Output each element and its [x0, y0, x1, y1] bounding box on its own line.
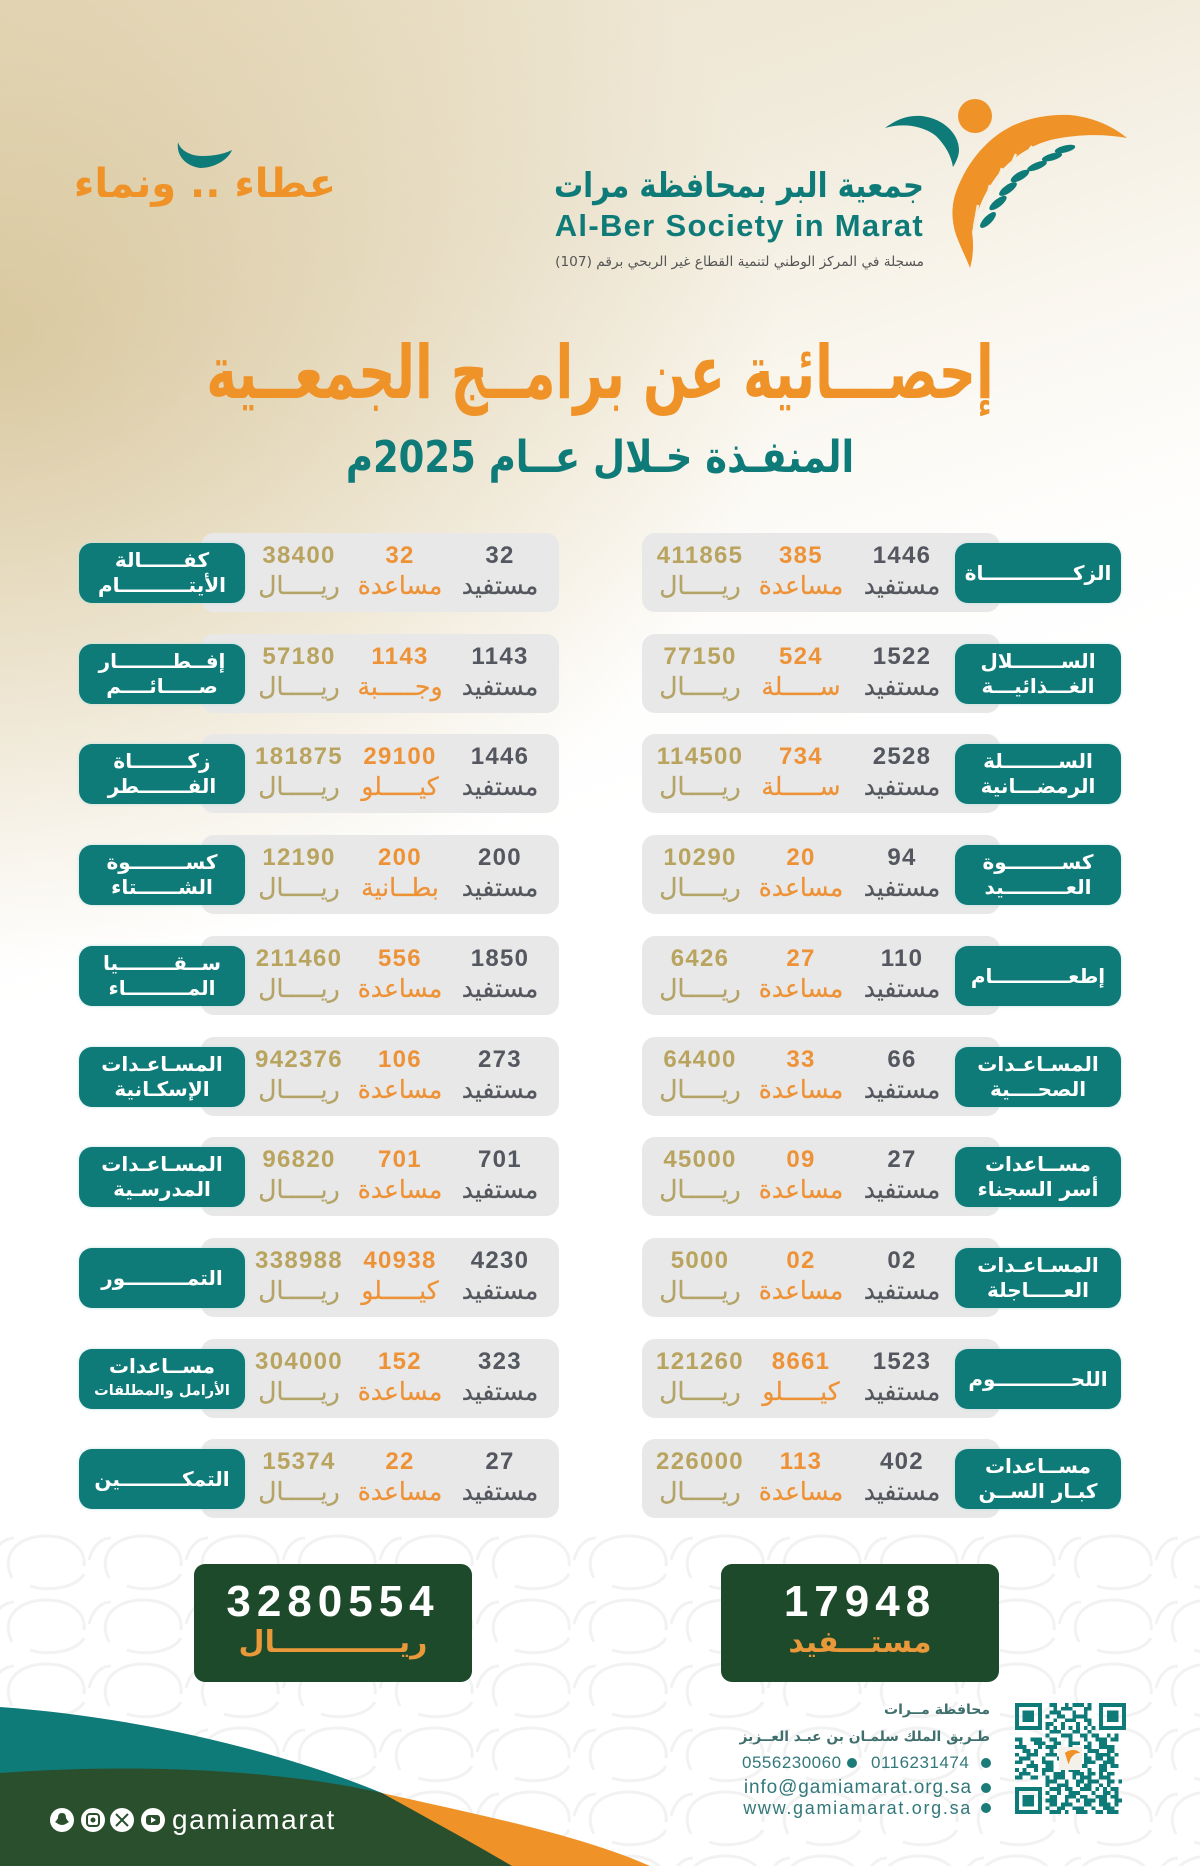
aid: 33 [786, 1046, 816, 1073]
category label: الأيتــــــــــام [98, 573, 226, 597]
row: السلة الرمضانية [642, 734, 1123, 813]
aid [759, 1247, 843, 1305]
category label: الفـــــــطر [108, 774, 216, 798]
beneficiaries: مستفيد [864, 1276, 940, 1305]
beneficiaries: مستفيد [462, 1075, 538, 1104]
category label [955, 1349, 1121, 1409]
amount: ريـــــال [258, 1477, 340, 1506]
row: المساعدات المدرسية [79, 1137, 559, 1217]
aid: ســـــلة [761, 672, 841, 701]
beneficiaries: مستفيد [462, 672, 538, 701]
aid: 200 [378, 844, 422, 871]
amount: 114500 [657, 743, 743, 770]
tagline: عطاء .. ونماء [74, 161, 336, 207]
beneficiaries: مستفيد [864, 772, 940, 801]
row: المساعدات الصحية [642, 1037, 1123, 1116]
beneficiaries: 200 [478, 844, 522, 871]
category label: العـــــــــيد [985, 875, 1091, 899]
beneficiaries: 273 [478, 1046, 522, 1073]
amount: ريـــــال [659, 974, 741, 1003]
category label: اللحـــــــــــوم [968, 1366, 1108, 1390]
beneficiaries: 02 [887, 1247, 917, 1274]
amount: ريـــــال [258, 1377, 340, 1406]
subtitle: المنفـذة خـلال عــام 2025م [346, 432, 854, 483]
beneficiaries [864, 1247, 940, 1305]
row: كسوة العيد [642, 835, 1123, 914]
category label [79, 1248, 245, 1308]
amount: ريـــــال [258, 571, 340, 600]
beneficiaries: مستفيد [462, 1175, 538, 1204]
contact dots [840, 1755, 1000, 1817]
aid [350, 944, 450, 1004]
aid: كيـــــلو [361, 1276, 439, 1305]
category label: مســاعدات [985, 1152, 1091, 1176]
aid: كيـــــلو [361, 772, 439, 801]
beneficiaries [450, 1145, 550, 1205]
amount [249, 1347, 349, 1407]
amount [659, 1247, 741, 1306]
row: السلال الغذائية [642, 634, 1123, 713]
amount [659, 643, 741, 702]
category label [955, 744, 1121, 804]
total riyals box: 3280554 [226, 1577, 440, 1626]
beneficiaries: مستفيد [462, 772, 538, 801]
amount: 226000 [656, 1448, 744, 1475]
amount: ريـــــال [659, 873, 741, 902]
category label: صـــــائــــم [106, 674, 218, 698]
beneficiaries [864, 844, 940, 902]
aid [350, 1347, 450, 1407]
row: إفطار صائم [79, 634, 559, 714]
row: كسوة الشتاء [79, 835, 559, 915]
amount: ريـــــال [258, 1075, 340, 1104]
social handle: gamiamarat [172, 1804, 336, 1835]
category label: زكــــــــاة [113, 749, 211, 773]
category label [955, 1449, 1121, 1509]
amount [249, 1045, 349, 1105]
beneficiaries [864, 542, 940, 600]
category label: المسـاعـدات [977, 1052, 1099, 1076]
amount: ريـــــال [659, 1276, 741, 1305]
row: زكاة الفطر [79, 734, 559, 814]
address: city: محافظة مــرات [884, 1702, 990, 1718]
category label: الأرامل والمطلقات [94, 1383, 230, 1399]
aid: 8661 [772, 1348, 830, 1375]
beneficiaries: 402 [880, 1448, 924, 1475]
amount: 181875 [255, 743, 343, 770]
row: كفالة الأيتام [79, 533, 559, 613]
beneficiaries: مستفيد [462, 1377, 538, 1406]
beneficiaries: 701 [478, 1146, 522, 1173]
amount: ريـــــال [258, 672, 340, 701]
category label: التمكـــــــــين [94, 1466, 230, 1490]
total beneficiaries box [721, 1564, 999, 1682]
category label: التمـــــــــور [101, 1266, 223, 1290]
title: إحصـــائية عن برامــج الجمعــية [206, 330, 994, 416]
beneficiaries [450, 1347, 550, 1407]
category label [79, 1449, 245, 1509]
beneficiaries [852, 1447, 952, 1507]
aid [761, 643, 841, 701]
aid [759, 945, 843, 1003]
beneficiaries [864, 1348, 940, 1406]
logo english name: Al-Ber Society in Marat [555, 208, 924, 243]
category label [955, 543, 1121, 603]
category label [79, 744, 245, 804]
aid: مساعدة [358, 1075, 442, 1104]
beneficiaries: 323 [478, 1348, 522, 1375]
amount: 15374 [262, 1448, 336, 1475]
phone numbers: 0116231474 [871, 1753, 969, 1772]
category label [79, 1047, 245, 1107]
beneficiaries: 1446 [471, 743, 529, 770]
category label: الرمضـــانية [981, 774, 1095, 798]
beneficiaries: مستفيد [864, 571, 940, 600]
beneficiaries: مستفيد [864, 974, 940, 1003]
aid [759, 1146, 843, 1204]
aid [751, 1447, 851, 1507]
beneficiaries: مستفيد [864, 1477, 940, 1506]
category label [79, 543, 245, 603]
category label: الشــــــتاء [111, 875, 213, 899]
logo registration line: مسجلة في المركز الوطني لتنمية القطاع غير الربحي برقم (107) [555, 254, 924, 270]
beneficiaries: مستفيد [864, 1175, 940, 1204]
aid: كيـــــلو [762, 1377, 840, 1406]
category label: الغـــذائيـــة [982, 674, 1094, 698]
aid [350, 742, 450, 802]
social icons [48, 1806, 168, 1834]
beneficiaries: مستفيد [462, 873, 538, 902]
amount: 411865 [657, 542, 743, 569]
aid [350, 1145, 450, 1205]
amount [650, 1447, 750, 1507]
amount: ريـــــال [659, 672, 741, 701]
total riyals box [194, 1564, 472, 1682]
amount [249, 1246, 349, 1306]
aid: مساعدة [759, 571, 843, 600]
amount: 96820 [262, 1146, 336, 1173]
beneficiaries: مستفيد [462, 1276, 538, 1305]
amount [249, 642, 349, 702]
amount [659, 945, 741, 1004]
amount: 57180 [262, 643, 336, 670]
row: مساعدات كبار السن [642, 1439, 1123, 1518]
amount: 45000 [663, 1146, 737, 1173]
category label: كســــــــوة [106, 850, 218, 874]
beneficiaries: مستفيد [864, 873, 940, 902]
beneficiaries: 66 [887, 1046, 917, 1073]
amount: ريـــــال [659, 1377, 741, 1406]
aid [761, 743, 841, 801]
amount [249, 944, 349, 1004]
row: إطعام [642, 936, 1123, 1015]
category label [955, 845, 1121, 905]
tagline swoosh [178, 142, 232, 168]
category label: الإسكـانية [114, 1077, 210, 1101]
aid: 1143 [371, 643, 429, 670]
category label [955, 644, 1121, 704]
beneficiaries: مستفيد [864, 672, 940, 701]
amount [249, 742, 349, 802]
category label [79, 946, 245, 1006]
aid: مساعدة [759, 1276, 843, 1305]
row: التمكين [79, 1439, 559, 1519]
aid [350, 1447, 450, 1507]
beneficiaries [450, 1045, 550, 1105]
beneficiaries: 1523 [873, 1348, 931, 1375]
beneficiaries: 1850 [471, 945, 529, 972]
beneficiaries: 2528 [873, 743, 931, 770]
beneficiaries [864, 945, 940, 1003]
beneficiaries [450, 843, 550, 903]
category label: الســـــــلال [980, 649, 1096, 673]
row: التمور [79, 1238, 559, 1318]
aid: مساعدة [358, 1175, 442, 1204]
aid: 02 [786, 1247, 816, 1274]
beneficiaries: 1522 [873, 643, 931, 670]
row: سقيا الماء [79, 936, 559, 1016]
amount [249, 1145, 349, 1205]
amount: 5000 [671, 1247, 729, 1274]
row: المساعدات العاجلة [642, 1238, 1123, 1317]
beneficiaries [450, 642, 550, 702]
aid [350, 642, 450, 702]
category label: المدرسـية [113, 1177, 211, 1201]
aid [761, 1348, 840, 1406]
aid: 113 [780, 1448, 822, 1475]
aid: 106 [378, 1046, 422, 1073]
beneficiaries [450, 944, 550, 1004]
aid: 734 [779, 743, 823, 770]
beneficiaries [864, 1046, 940, 1104]
beneficiaries [450, 541, 550, 601]
category label [955, 1248, 1121, 1308]
category label: مســاعدات [985, 1454, 1091, 1478]
beneficiaries: 4230 [471, 1247, 529, 1274]
email: info@gamiamarat.org.sa [744, 1777, 972, 1798]
category label: كبـار الســن [978, 1479, 1098, 1503]
aid [350, 541, 450, 601]
aid: 556 [378, 945, 422, 972]
background pattern [0, 1534, 1200, 1866]
aid: مساعدة [358, 571, 442, 600]
category label: الســــــــلة [983, 749, 1093, 773]
row: مساعدات الأرامل والمطلقات [79, 1339, 559, 1419]
aid: مساعدة [759, 974, 843, 1003]
amount [249, 1447, 349, 1507]
category label: إطعـــــــــــام [971, 964, 1105, 988]
aid: وجـــــبة [357, 672, 443, 701]
beneficiaries [864, 643, 940, 701]
beneficiaries: 1446 [873, 542, 931, 569]
beneficiaries [450, 1246, 550, 1306]
phone numbers: 0556230060 [742, 1753, 842, 1772]
category label: كفــــــالة [115, 548, 209, 572]
aid: مساعدة [759, 1477, 843, 1506]
amount: 211460 [256, 945, 342, 972]
beneficiaries [864, 1146, 940, 1204]
category label: إفــطــــــــار [99, 649, 225, 673]
amount: ريـــــال [258, 772, 340, 801]
row: مساعدات أسر السجناء [642, 1137, 1123, 1216]
aid: 152 [378, 1348, 422, 1375]
category label: المسـاعـدات [101, 1052, 223, 1076]
beneficiaries: 27 [887, 1146, 917, 1173]
aid: 09 [786, 1146, 816, 1173]
category label [955, 1047, 1121, 1107]
beneficiaries: مستفيد [864, 1377, 940, 1406]
aid: 40938 [363, 1247, 437, 1274]
amount: 942376 [255, 1046, 343, 1073]
amount: 338988 [255, 1247, 343, 1274]
QR code [1015, 1702, 1126, 1815]
amount: ريـــــال [258, 873, 340, 902]
aid: 22 [385, 1448, 415, 1475]
category label: المسـاعـدات [977, 1253, 1099, 1277]
beneficiaries: مستفيد [462, 974, 538, 1003]
aid [759, 844, 843, 902]
aid: 27 [786, 945, 816, 972]
footer waves [0, 1700, 660, 1866]
amount: 77150 [663, 643, 737, 670]
aid [759, 1046, 843, 1104]
category label: ســقــــــــيا [103, 951, 221, 975]
aid: بطــانية [361, 873, 439, 902]
amount [249, 843, 349, 903]
category label: الصحــــية [990, 1077, 1086, 1101]
beneficiaries: 1143 [471, 643, 529, 670]
row: المساعدات الإسكانية [79, 1037, 559, 1117]
aid: مساعدة [358, 974, 442, 1003]
aid: ســـــلة [761, 772, 841, 801]
category label: العـــــاجلة [987, 1278, 1089, 1302]
beneficiaries: 94 [887, 844, 917, 871]
beneficiaries [450, 1447, 550, 1507]
aid: 32 [385, 542, 415, 569]
category label: مســاعدات [109, 1354, 215, 1378]
aid: مساعدة [759, 1175, 843, 1204]
amount: ريـــــال [258, 1175, 340, 1204]
total beneficiaries box: 17948 [784, 1577, 936, 1626]
beneficiaries [450, 742, 550, 802]
amount: 64400 [663, 1046, 737, 1073]
category label [79, 1349, 245, 1409]
aid [350, 1045, 450, 1105]
amount [659, 1146, 741, 1204]
beneficiaries: مستفيد [462, 1477, 538, 1506]
phone numbers [742, 1752, 996, 1774]
amount: ريـــــال [659, 1175, 741, 1204]
amount: 6426 [671, 945, 729, 972]
amount [659, 844, 741, 902]
amount: ريـــــال [659, 571, 741, 600]
category label: الزكـــــــــــــاة [965, 560, 1111, 584]
amount [656, 1348, 744, 1406]
amount [657, 743, 743, 802]
aid [350, 1246, 450, 1306]
amount: 304000 [255, 1348, 343, 1375]
aid: مساعدة [759, 1075, 843, 1104]
category label: المـــــــــاء [108, 976, 216, 1000]
aid: مساعدة [358, 1477, 442, 1506]
logo emblem [885, 99, 1127, 268]
amount: ريـــــال [659, 1075, 741, 1104]
category label: كســــــــوة [982, 850, 1094, 874]
category label [955, 946, 1121, 1006]
beneficiaries: مستفيد [864, 1075, 940, 1104]
aid [759, 542, 843, 600]
amount: ريـــــال [258, 1276, 340, 1305]
amount: 121260 [656, 1348, 744, 1375]
aid: مساعدة [759, 873, 843, 902]
amount: ريـــــال [659, 772, 741, 801]
aid: 385 [779, 542, 823, 569]
aid: 29100 [363, 743, 437, 770]
row: الزكاة [642, 533, 1123, 612]
category label: أسر السجناء [978, 1177, 1098, 1201]
row: اللحوم [642, 1339, 1123, 1418]
amount: 12190 [262, 844, 336, 871]
total riyals box: ريــــــــــــال [239, 1625, 427, 1660]
beneficiaries: 32 [485, 542, 515, 569]
website: www.gamiamarat.org.sa [743, 1798, 972, 1818]
category label [79, 1147, 245, 1207]
aid: مساعدة [358, 1377, 442, 1406]
beneficiaries [864, 743, 940, 801]
aid: 701 [378, 1146, 422, 1173]
category label [79, 845, 245, 905]
category label: المسـاعـدات [101, 1152, 223, 1176]
amount [249, 541, 349, 601]
aid [350, 843, 450, 903]
beneficiaries: 110 [881, 945, 923, 972]
amount: 10290 [663, 844, 737, 871]
category label [79, 644, 245, 704]
beneficiaries: 27 [485, 1448, 515, 1475]
address: street: طـريق الملك سلمـان بن عبـد العــزيز [740, 1729, 990, 1745]
aid: 524 [779, 643, 823, 670]
category label [955, 1147, 1121, 1207]
amount [659, 1046, 741, 1104]
aid: 20 [786, 844, 816, 871]
beneficiaries: مستفيد [462, 571, 538, 600]
amount: ريـــــال [258, 974, 340, 1003]
total beneficiaries box: مستـــفيد [788, 1625, 932, 1660]
amount: 38400 [262, 542, 336, 569]
amount [657, 542, 743, 600]
amount: ريـــــال [659, 1477, 741, 1506]
logo arabic name: جمعية البر بمحافظة مرات [554, 166, 924, 206]
